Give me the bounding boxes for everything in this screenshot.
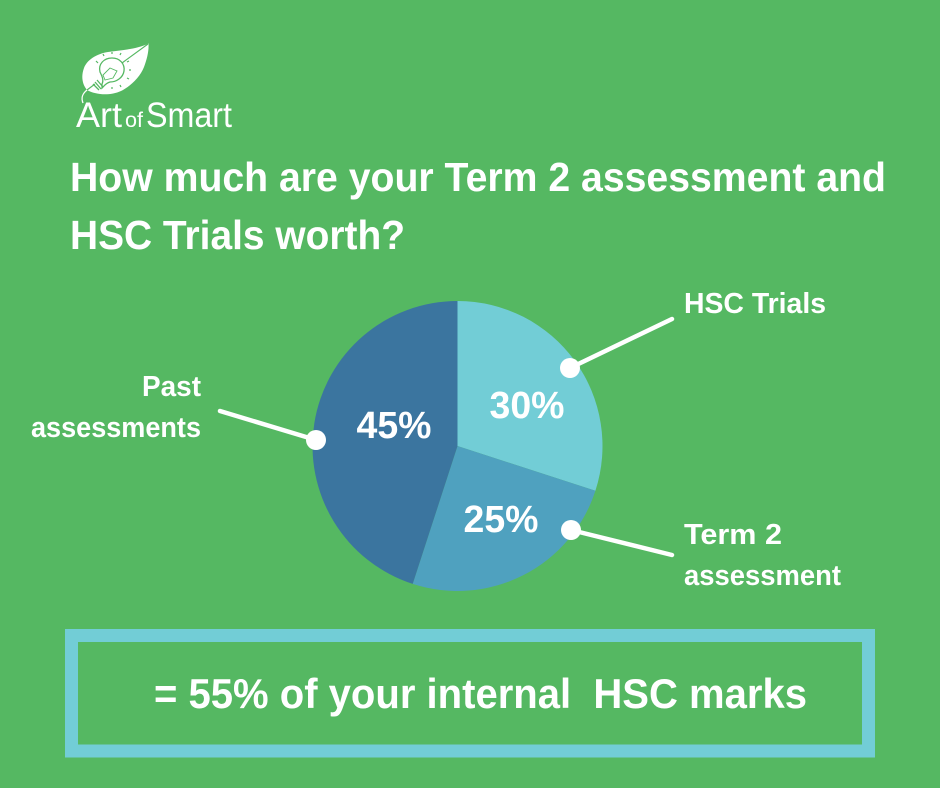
- summary text: = 55% of your internal HSC marks: [154, 670, 807, 717]
- logo wordmark: of: [125, 109, 143, 132]
- label: Past: [142, 371, 201, 403]
- callout: Term 2 assessment: [561, 519, 841, 592]
- slice: Past assessments 45%: [313, 301, 458, 584]
- title line 1: How much are your Term 2 assessment and: [70, 154, 886, 200]
- box border: [72, 636, 868, 751]
- callout: HSC Trials: [560, 288, 826, 378]
- callout: Past assessments: [31, 371, 326, 450]
- label: assessments: [31, 412, 201, 444]
- logo wordmark: Smart: [146, 96, 232, 135]
- title: [70, 154, 886, 258]
- logo wordmark: Art: [76, 96, 122, 135]
- leader line to dot: [220, 411, 316, 440]
- logo wordmark: [76, 96, 232, 135]
- value: 45%: 45%: [356, 405, 432, 447]
- logo: Art of Smart: [76, 44, 232, 135]
- slice: Term 2 assessment 25%: [413, 446, 595, 591]
- icon: leaf with light bulb: [82, 44, 149, 103]
- value: 30%: 30%: [490, 385, 564, 427]
- slice: HSC Trials 30%: [458, 301, 602, 491]
- title line 2: HSC Trials worth?: [70, 212, 405, 258]
- pie chart: [313, 301, 602, 591]
- label: Term 2: [684, 519, 782, 551]
- summary box: [72, 636, 868, 751]
- leader line to dot: [571, 530, 672, 555]
- leader line: [570, 319, 672, 368]
- label: assessment: [684, 560, 841, 592]
- value: 25%: 25%: [464, 499, 538, 541]
- label: HSC Trials: [684, 288, 826, 320]
